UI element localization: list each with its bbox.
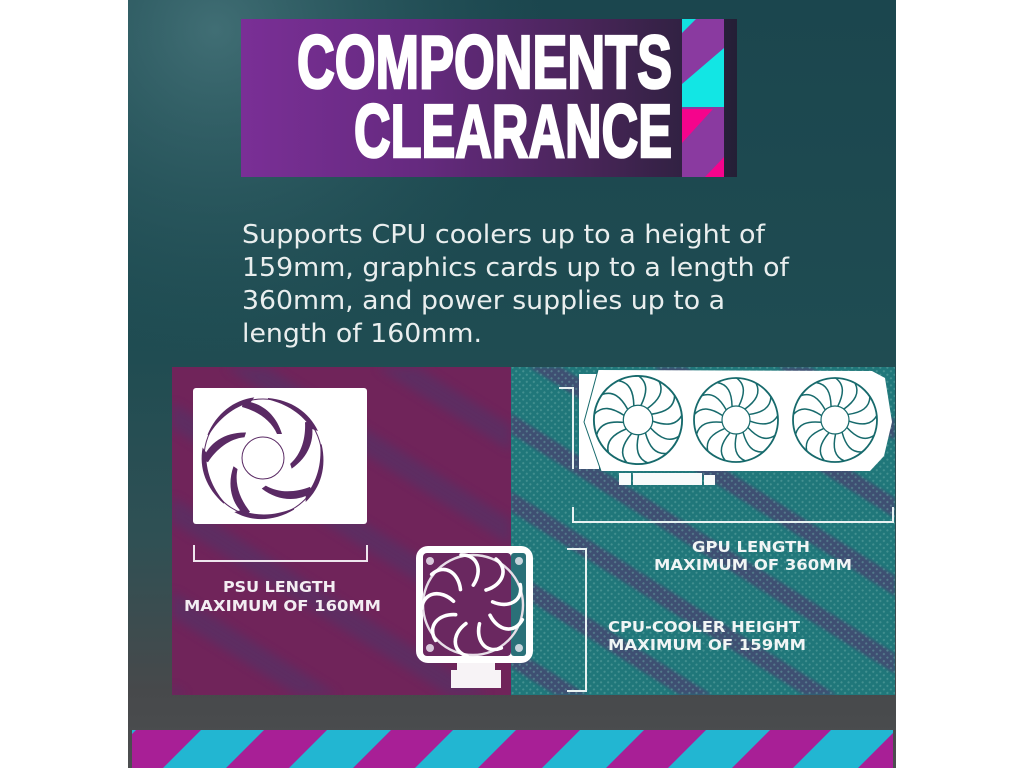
title banner — [241, 19, 737, 177]
PSU length bracket — [194, 545, 367, 561]
PSU fan — [183, 387, 337, 539]
banner accent bar — [682, 19, 724, 177]
CPU height bracket — [567, 549, 586, 691]
page background panel — [128, 0, 896, 768]
GPU length bracket — [573, 507, 893, 522]
description text: Supports CPU coolers up to a height of — [242, 220, 766, 250]
GPU height tick — [559, 388, 573, 469]
PSU label: MAXIMUM OF 160MM — [184, 597, 381, 615]
GPU label: GPU LENGTH — [692, 538, 810, 556]
bottom diagonal stripe band — [132, 730, 893, 768]
heading — [297, 20, 672, 173]
PSU label — [184, 578, 381, 615]
clearance diagram panel — [172, 367, 895, 695]
GPU label — [654, 538, 852, 574]
icon: CPU cooler — [416, 546, 533, 688]
CPU label — [608, 618, 806, 654]
heading: COMPONENTS — [297, 20, 672, 104]
CPU label: MAXIMUM OF 159MM — [608, 636, 806, 654]
description text: 360mm, and power supplies up to a — [242, 286, 725, 316]
panel: teal GPU side — [511, 367, 895, 695]
description text — [242, 220, 790, 349]
PSU label: PSU LENGTH — [223, 578, 336, 596]
icon: PSU — [183, 387, 367, 539]
cooler fan — [418, 550, 526, 658]
heading: CLEARANCE — [354, 89, 672, 173]
GPU label: MAXIMUM OF 360MM — [654, 556, 852, 574]
description text: length of 160mm. — [242, 319, 482, 349]
GPU fans — [594, 375, 878, 464]
CPU label: CPU-COOLER HEIGHT — [608, 618, 800, 636]
icon: graphics card — [579, 370, 892, 485]
panel: purple PSU side — [172, 367, 511, 695]
description text: 159mm, graphics cards up to a length of — [242, 253, 790, 283]
